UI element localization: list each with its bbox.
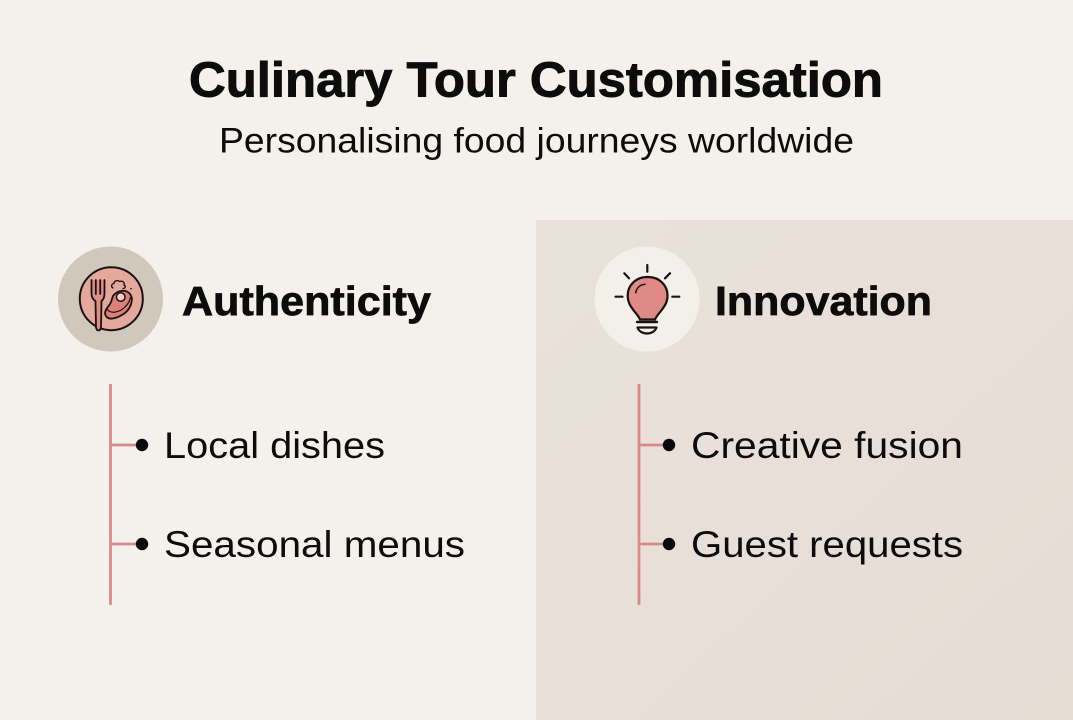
- icon: plate with fork and steak: [58, 246, 163, 352]
- heading: Innovation: Innovation: [715, 278, 932, 324]
- panel: innovation: [594, 246, 963, 605]
- bullet: Seasonal menus: Seasonal menus: [164, 524, 465, 565]
- icon: light bulb: [594, 246, 700, 352]
- subtitle: Personalising food journeys worldwide: [219, 122, 854, 160]
- connector tree: [110, 384, 141, 605]
- title: Culinary Tour Customisation: [189, 54, 883, 108]
- bullet: Creative fusion: Creative fusion: [691, 425, 963, 466]
- connector tree: [639, 384, 668, 605]
- panel: authenticity: [58, 246, 465, 605]
- bullet: Guest requests: Guest requests: [691, 524, 963, 565]
- bullet: Local dishes: Local dishes: [164, 425, 385, 466]
- panel: innovation background: [536, 220, 1073, 720]
- heading: Authenticity: Authenticity: [182, 278, 431, 324]
